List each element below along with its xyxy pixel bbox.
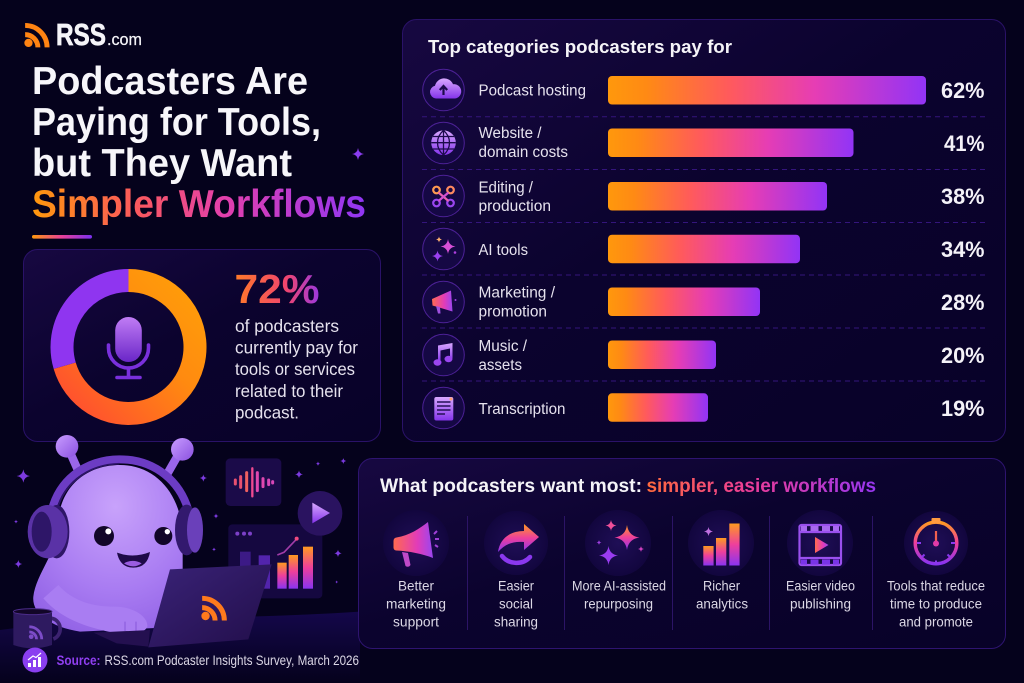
mascot body (33, 465, 183, 632)
arm and paw (43, 585, 147, 634)
row: podcast hosting: 62% (941, 78, 984, 103)
sparkles (14, 458, 346, 584)
source line: Source: (56, 653, 100, 668)
panel: 72% stat (24, 250, 380, 442)
item: easier social sharing (484, 511, 548, 630)
item: easier social sharing: social (499, 596, 533, 612)
item: tools that reduce time: and promote (899, 614, 973, 630)
item: more AI-assisted repurposing: repurposing (584, 596, 653, 612)
row: editing / production: Editing / (478, 180, 534, 196)
row: music / assets (423, 334, 984, 376)
icon: scissors (423, 175, 464, 217)
icon: bar chart (688, 510, 754, 576)
row: editing / production (423, 175, 984, 217)
icon: megaphone (423, 281, 464, 323)
mug (13, 609, 60, 648)
stat description: tools or services (235, 359, 355, 379)
row: website / domain costs: Website / (478, 125, 542, 142)
heading: what podcasters want most (380, 476, 876, 497)
icon: megaphone (383, 510, 449, 576)
item: better marketing support: support (393, 614, 439, 630)
row: marketing / promotion: 28% (941, 290, 984, 315)
stat description: podcast. (235, 402, 299, 422)
item: easier video publishing (786, 510, 855, 612)
chart tile (228, 524, 322, 598)
headphone left (28, 505, 69, 558)
row: AI tools (423, 228, 984, 270)
logo: RSS.com: RSS (56, 17, 106, 52)
icon: RSS on laptop (201, 598, 224, 621)
icon: film strip (787, 510, 853, 576)
item: more AI-assisted repurposing: More AI-assisted (572, 578, 666, 594)
item: tools that reduce time (887, 511, 985, 630)
title: Paying for Tools, (32, 101, 321, 144)
item: better marketing support: marketing (386, 596, 446, 612)
icon: music note (423, 334, 464, 376)
row: marketing / promotion (423, 281, 984, 323)
row: website / domain costs (423, 122, 984, 164)
icon: sparkles (423, 228, 464, 270)
play button (298, 491, 342, 536)
row: music / assets: 20% (941, 343, 984, 368)
title: Podcasters Are (32, 60, 308, 103)
item: easier video publishing: Easier video (786, 578, 855, 594)
row: marketing / promotion: Marketing / (478, 285, 556, 302)
item: richer analytics: Richer (703, 578, 740, 594)
source line: RSS.com Podcaster Insights Survey, March 2026 (104, 653, 359, 668)
icon: sparkles (585, 510, 651, 576)
item: richer analytics (688, 510, 754, 612)
row: website / domain costs: 41% (944, 131, 984, 156)
row: website / domain costs: domain costs (478, 144, 568, 161)
row: transcription: 19% (941, 396, 984, 421)
title: but They Want (32, 142, 292, 185)
logo: RSS.com: .com (107, 30, 142, 49)
eyes (94, 526, 172, 546)
row: editing / production: production (478, 198, 551, 215)
icon: sparkle (352, 148, 364, 160)
stat description: currently pay for (235, 338, 358, 358)
stat description: related to their (235, 381, 343, 401)
icon: RSS logo (24, 25, 47, 47)
stat description: of podcasters (235, 316, 339, 336)
title underline (32, 235, 92, 239)
item: easier video publishing: publishing (790, 596, 851, 612)
icon: RSS on mug (29, 627, 42, 639)
title: Simpler Workflows (32, 183, 366, 226)
row: music / assets: Music / (478, 338, 528, 355)
item: more AI-assisted repurposing (572, 510, 666, 612)
item: easier social sharing: Easier (498, 578, 534, 594)
antennae (56, 435, 194, 477)
panel: top categories (402, 20, 1006, 442)
row: podcast hosting: Podcast hosting (478, 82, 586, 100)
row: AI tools: 34% (941, 237, 984, 262)
waveform tile (226, 458, 281, 506)
item: richer analytics: analytics (696, 596, 748, 612)
item: better marketing support (383, 510, 449, 630)
stat number: 72% (234, 266, 320, 312)
floor glow (0, 612, 360, 683)
icon: document (423, 387, 464, 429)
icon: stopwatch (904, 511, 968, 575)
heading: what podcasters want most: What podcasters want most: (380, 476, 642, 497)
item: better marketing support: Better (398, 578, 434, 594)
icon: share arrow (484, 511, 548, 575)
icon: microphone (108, 317, 148, 378)
stat description (235, 316, 358, 422)
donut chart (62, 280, 195, 414)
logo: RSS.com (24, 17, 142, 52)
icon: globe (423, 122, 464, 164)
row: transcription: Transcription (478, 401, 566, 418)
row: music / assets: assets (478, 357, 522, 374)
item: tools that reduce time: Tools that reduce (887, 578, 985, 594)
item: easier social sharing: sharing (494, 614, 538, 630)
icon: cloud upload (423, 69, 464, 111)
headband (50, 459, 191, 520)
laptop (93, 564, 272, 647)
item: tools that reduce time: time to produce (890, 596, 982, 612)
illustration: mascot with laptop (0, 435, 360, 683)
row: marketing / promotion: promotion (478, 304, 547, 321)
headphone right (175, 505, 203, 555)
source line (22, 648, 359, 672)
title (32, 60, 366, 226)
icon: source chart (22, 648, 48, 672)
panel: what podcasters want (358, 458, 1006, 648)
row: transcription (423, 387, 984, 429)
row: AI tools: AI tools (478, 242, 528, 259)
mouth (117, 552, 150, 568)
heading: top categories: Top categories podcasters pay for (428, 36, 732, 57)
row: editing / production: 38% (941, 184, 984, 209)
heading: what podcasters want most: simpler, easier workflows (646, 476, 876, 497)
row: podcast hosting (423, 69, 984, 111)
